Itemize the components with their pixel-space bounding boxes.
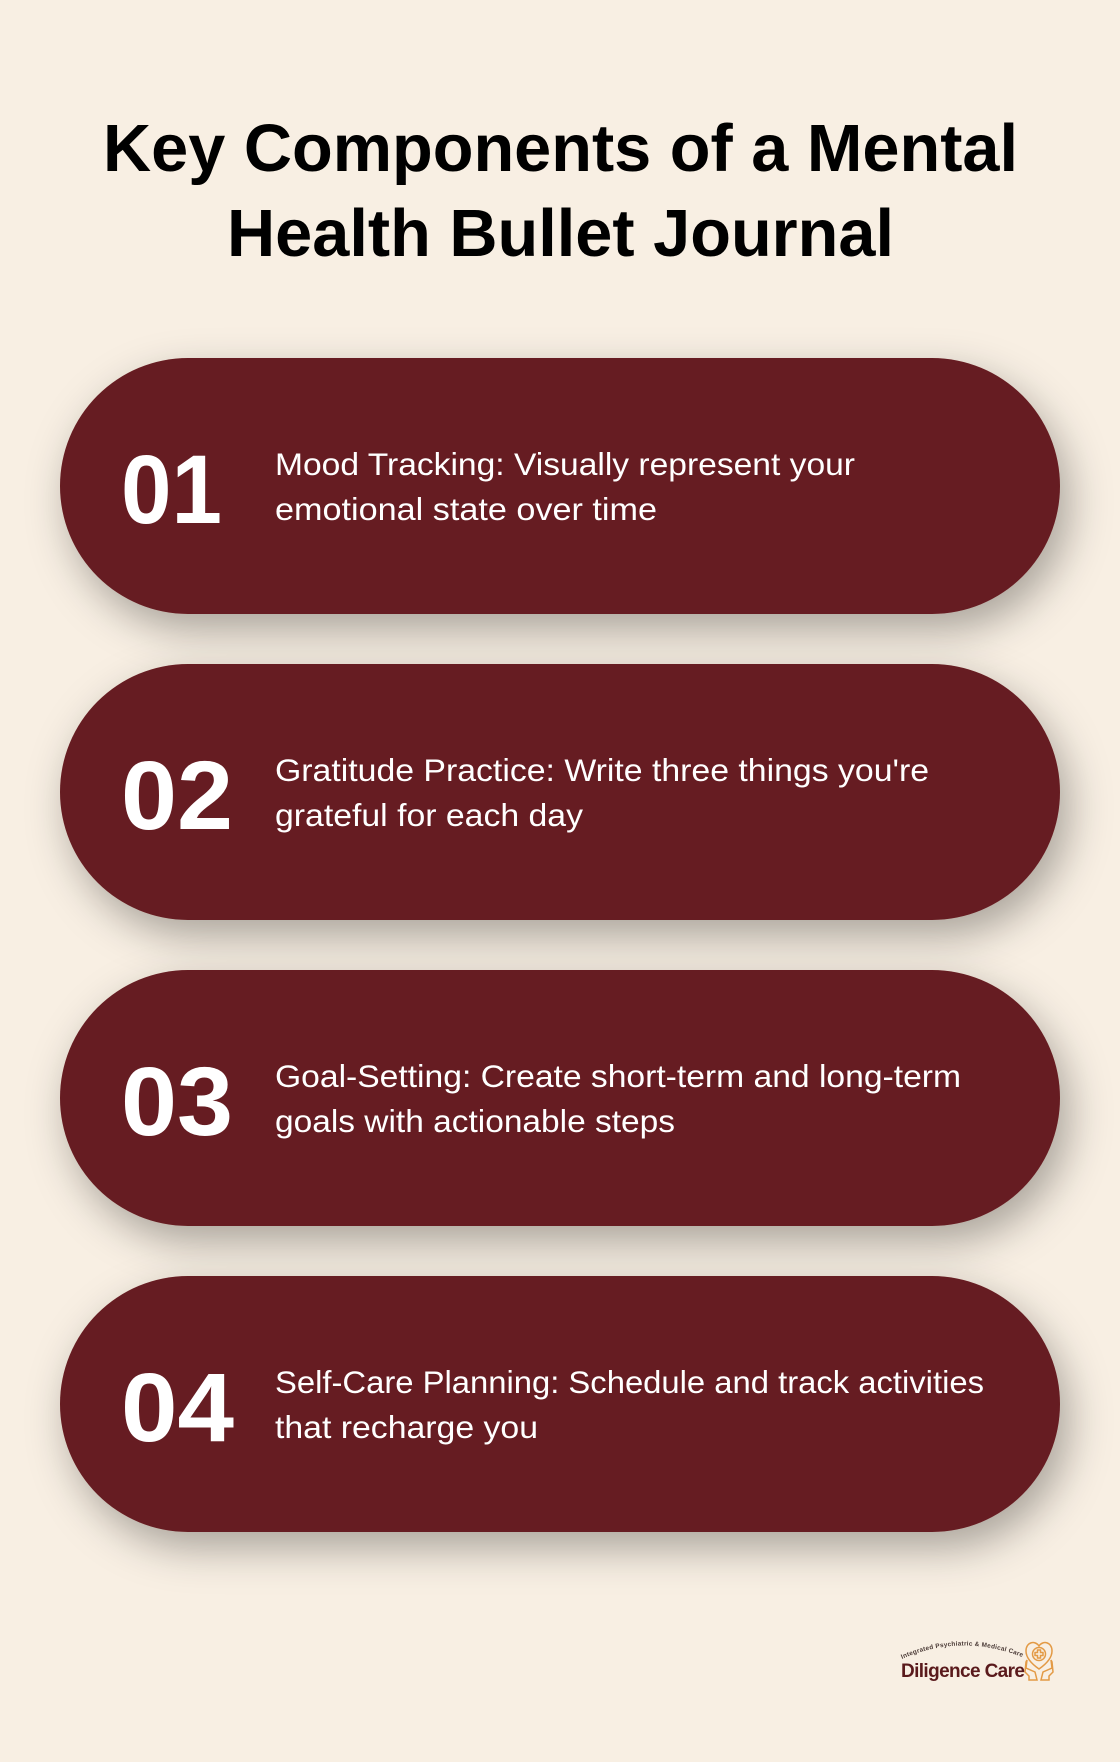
text: gratitude practice: Gratitude Practice: Write three things you're	[275, 752, 929, 788]
panel: step 01 mood tracking	[60, 358, 1060, 614]
number 02: 02	[121, 741, 233, 850]
panel: step 04 self-care planning	[60, 1276, 1060, 1532]
logo: Diligence Care	[900, 1640, 1054, 1682]
text: mood tracking	[275, 446, 855, 527]
text: gratitude practice: grateful for each day	[275, 797, 583, 833]
panel: step 02 gratitude practice	[60, 664, 1060, 920]
text: gratitude practice	[275, 752, 929, 833]
text: mood tracking: Mood Tracking: Visually represent your	[275, 446, 855, 482]
text: goal-setting: Goal-Setting: Create short-term and long-term	[275, 1058, 961, 1094]
title	[103, 111, 1018, 271]
panel: step 03 goal-setting	[60, 970, 1060, 1226]
text: goal-setting: goals with actionable steps	[275, 1103, 675, 1139]
title: Key Components of a Mental	[103, 111, 1018, 186]
text: goal-setting	[275, 1058, 961, 1139]
number 03: 03	[121, 1047, 233, 1156]
title: Health Bullet Journal	[227, 196, 894, 271]
number 01: 01	[121, 435, 222, 544]
number 04: 04	[121, 1353, 234, 1462]
logo tagline: Integrated Psychiatric & Medical Care	[900, 1640, 1023, 1659]
text: self-care planning: that recharge you	[275, 1409, 538, 1445]
text: mood tracking: emotional state over time	[275, 491, 657, 527]
text: self-care planning: Self-Care Planning: Schedule and track activities	[275, 1364, 984, 1400]
icon: heart with medical cross in hands	[1025, 1643, 1053, 1680]
logo wordmark: Diligence Care	[901, 1661, 1025, 1682]
text: self-care planning	[275, 1364, 984, 1445]
